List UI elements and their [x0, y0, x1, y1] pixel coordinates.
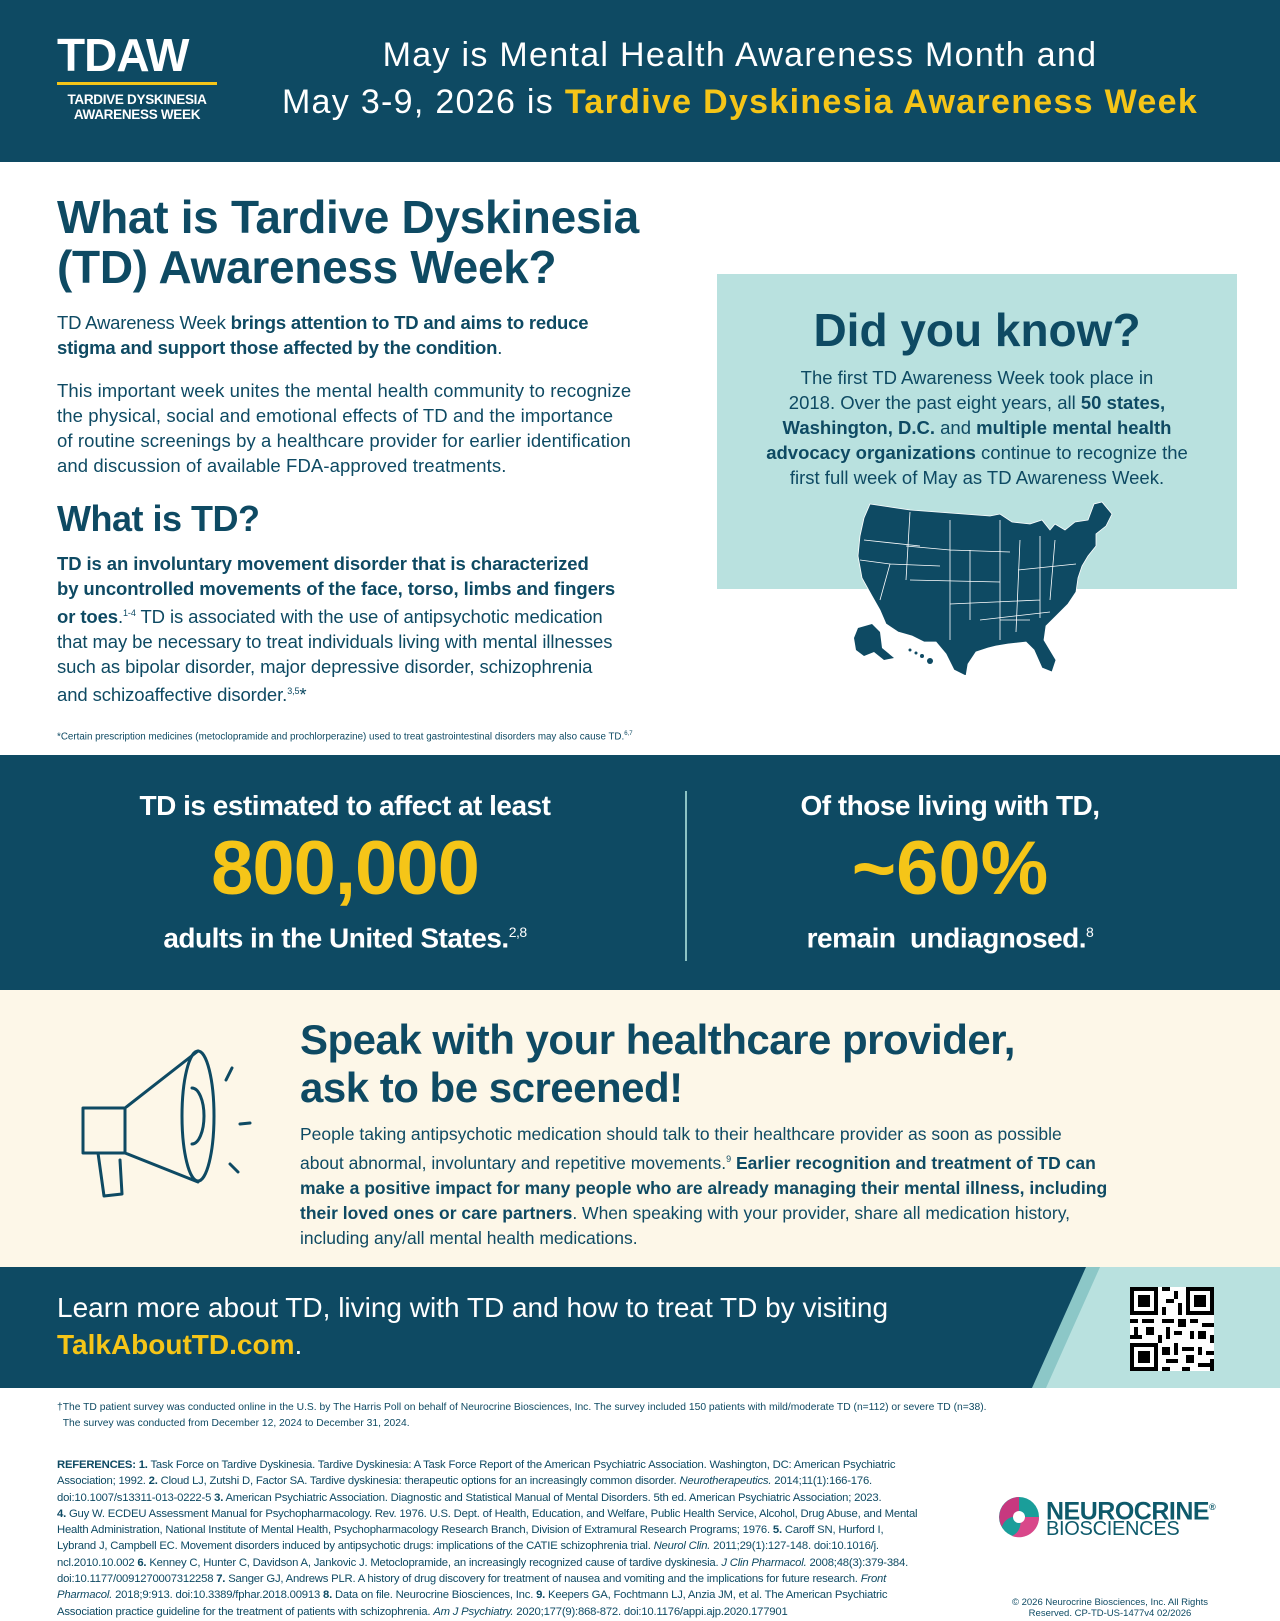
text: screening advice: their loved ones or care partners. When speaking with your provider, share all medication history,: [300, 1203, 1070, 1223]
stat: 800,000 adults: [140, 790, 551, 953]
text: references: ncl.2010.10.002 6. Kenney C, Hunter C, Davidson A, Jankovic J. Metoclopramide, an increasingly recognized cause of tardive dyskinesia. J Clin Pharmacol. 2008;48(3):379-384.: [57, 1557, 908, 1569]
text: did you know body: first full week of May as TD Awareness Week.: [790, 467, 1164, 488]
text: references: doi:10.1007/s13311-013-0222-5 3. American Psychiatric Association. Diagnostic and Statistical Manual of Mental Disorders. 5th ed. American Psychiatric Association; 2023.: [57, 1492, 881, 1504]
logo: TDAW: AWARENESS WEEK: [74, 107, 200, 122]
band: learn more: [0, 1267, 1280, 1388]
text: references: Association practice guideline for the treatment of patients with schizophrenia. Am J Psychiatry. 2020;177(9):868-872. doi:10.1176/appi.ajp.2020.177901: [57, 1606, 788, 1618]
text: TD definition: or toes.1-4 TD is associated with the use of antipsychotic medication: [57, 606, 603, 627]
text: copyright: © 2026 Neurocrine Biosciences, Inc. All Rights: [1012, 1597, 1208, 1608]
footnote: survey: The survey was conducted from December 12, 2024 to December 31, 2024.: [63, 1418, 410, 1429]
heading: Speak with your healthcare provider: Speak with your healthcare provider,: [300, 1016, 1015, 1063]
text: did you know body: Washington, D.C. and multiple mental health: [783, 417, 1171, 438]
text: references: REFERENCES: 1. Task Force on Tardive Dyskinesia. Tardive Dyskinesia: A Task Force Report of the American Psychiatric Association. Washington, DC: American Psychiatric: [57, 1459, 895, 1471]
title: What is TD Awareness Week: [57, 191, 640, 293]
text: did you know body: [766, 367, 1188, 488]
heading: Speak with your healthcare provider: [300, 1016, 1015, 1111]
logo: TDAW: TARDIVE DYSKINESIA: [67, 92, 207, 107]
text: TD definition: by uncontrolled movements of the face, torso, limbs and fingers: [57, 578, 615, 599]
logo: Neurocrine Biosciences: BIOSCIENCES: [1046, 1518, 1179, 1540]
panel: speak with provider: [0, 990, 1280, 1267]
header headline: [282, 36, 1198, 121]
divider: [685, 791, 687, 961]
header headline: May is Mental Health Awareness Month and: [383, 36, 1097, 74]
header band: [0, 0, 1280, 162]
text: screening advice: [300, 1124, 1107, 1248]
text: TD definition: such as bipolar disorder, major depressive disorder, schizophrenia: [57, 656, 592, 677]
text: references: 4. Guy W. ECDEU Assessment Manual for Psychopharmacology. Rev. 1976. U.S. Dept. of Health, Education, and Welfare, Public Health Service, Alcohol, Drug Abuse, and Mental: [57, 1508, 917, 1520]
logo: TDAW: TDAW: [57, 29, 188, 81]
text: second paragraph: of routine screenings by a healthcare provider for earlier identification: [57, 430, 631, 451]
text: learn more: TalkAboutTD.com.: [57, 1329, 302, 1360]
text: did you know body: The first TD Awareness Week took place in: [801, 367, 1153, 388]
footnote: GI medicines: *Certain prescription medicines (metoclopramide and prochlorperazine) used to treat gastrointestinal disorders may also cause TD.6,7: [57, 731, 633, 742]
text: references: doi:10.1177/0091270007312258 7. Sanger GJ, Andrews PLR. A history of drug discovery for treatment of nausea and vomiting and the implications for future research. Front: [57, 1573, 886, 1585]
panel: Did you know: [717, 274, 1237, 589]
stat: 800,000 adults: 800,000: [211, 826, 479, 911]
text: copyright: Reserved. CP-TD-US-1477v4 02/2026: [1029, 1608, 1191, 1619]
text: did you know body: advocacy organizations continue to recognize the: [766, 442, 1188, 463]
stat: 60% undiagnosed: [800, 790, 1100, 954]
stat: 800,000 adults: TD is estimated to affect at least: [140, 790, 550, 821]
stat: 800,000 adults: adults in the United States.2,8: [163, 922, 527, 953]
text: did you know body: 2018. Over the past eight years, all 50 states,: [789, 392, 1165, 413]
stat: 60% undiagnosed: ~60%: [852, 826, 1048, 911]
Alaska: [854, 624, 894, 660]
heading: What is TD?: What is TD?: [57, 498, 259, 539]
text: screening advice: make a positive impact for many people who are already managing their mental illness, including: [300, 1178, 1107, 1198]
icon: swirl: [999, 1497, 1039, 1538]
heading: Speak with your healthcare provider: ask to be screened!: [300, 1064, 683, 1111]
text: screening advice: including any/all mental health medications.: [300, 1228, 638, 1248]
text: references: Pharmacol. 2018;9:913. doi:10.3389/fphar.2018.00913 8. Data on file. Neurocrine Biosciences, Inc. 9. Keepers GA, Fochtmann LJ, Anzia JM, et al. The American Psychiatric: [57, 1589, 887, 1601]
text: intro paragraph: [57, 312, 588, 358]
logo: Neurocrine Biosciences: [999, 1497, 1216, 1540]
text: references: Health Administration, National Institute of Mental Health, Psychopharmacology Research Branch, Division of Extramural Research Programs; 1976. 5. Caroff SN, Hurford I,: [57, 1524, 883, 1536]
footnote: survey: [57, 1402, 986, 1429]
text: second paragraph: the physical, social and emotional effects of TD and the importance: [57, 405, 613, 426]
text: copyright: [1012, 1597, 1208, 1619]
text: TD definition: that may be necessary to treat individuals living with mental illnesses: [57, 631, 612, 652]
heading: Did you know?: Did you know?: [813, 304, 1141, 356]
Hawaii: [908, 648, 933, 664]
text: references: Lybrand J, Campbell EC. Movement disorders induced by antipsychotic drugs: implications of the CATIE schizophrenia trial. Neurol Clin. 2011;29(1):127-148. doi:10.1016/j.: [57, 1540, 879, 1552]
header headline: May 3-9, 2026 is Tardive Dyskinesia Awareness Week: [282, 83, 1198, 121]
icon: QR code: [1130, 1287, 1214, 1371]
text: references: [57, 1459, 917, 1618]
text: TD definition: TD is an involuntary movement disorder that is characterized: [57, 553, 589, 574]
text: intro paragraph: stigma and support those affected by the condition.: [57, 337, 502, 358]
text: intro paragraph: TD Awareness Week brings attention to TD and aims to reduce: [57, 312, 588, 333]
text: TD definition: and schizoaffective disorder.3,5*: [57, 684, 307, 705]
text: second paragraph: This important week unites the mental health community to recognize: [57, 380, 631, 401]
title: What is TD Awareness Week: What is Tardive Dyskinesia: [57, 191, 639, 243]
icon: megaphone: [82, 1049, 252, 1198]
text: second paragraph: [57, 380, 631, 476]
text: references: Association; 1992. 2. Cloud LJ, Zutshi D, Factor SA. Tardive dyskinesia: therapeutic options for an increasingly common disorder. Neurotherapeutics. 2014;11(1):166-176.: [57, 1475, 872, 1487]
text: learn more: Learn more about TD, living with TD and how to treat TD by visiting: [57, 1292, 888, 1323]
text: screening advice: about abnormal, involuntary and repetitive movements.9 Earlier recognition and treatment of TD can: [300, 1153, 1096, 1173]
stat: 60% undiagnosed: Of those living with TD,: [800, 790, 1100, 821]
logo: Neurocrine Biosciences: NEUROCRINE®: [1046, 1497, 1215, 1525]
map: USA: [854, 502, 1112, 675]
logo: TDAW: [57, 29, 217, 122]
text: second paragraph: and discussion of available FDA-approved treatments.: [57, 455, 506, 476]
text: learn more: [57, 1292, 888, 1360]
footnote: survey: †The TD patient survey was conducted online in the U.S. by The Harris Poll on behalf of Neurocrine Biosciences, Inc. The survey included 150 patients with mild/moderate TD (n=112) or severe TD (n=38).: [57, 1402, 986, 1413]
title: What is TD Awareness Week: (TD) Awareness Week?: [57, 241, 556, 293]
text: TD definition: [57, 553, 615, 705]
text: screening advice: People taking antipsychotic medication should talk to their healthcare provider as soon as possible: [300, 1124, 1062, 1144]
stats band: [0, 755, 1280, 990]
stat: 60% undiagnosed: remain undiagnosed.8: [807, 922, 1093, 953]
